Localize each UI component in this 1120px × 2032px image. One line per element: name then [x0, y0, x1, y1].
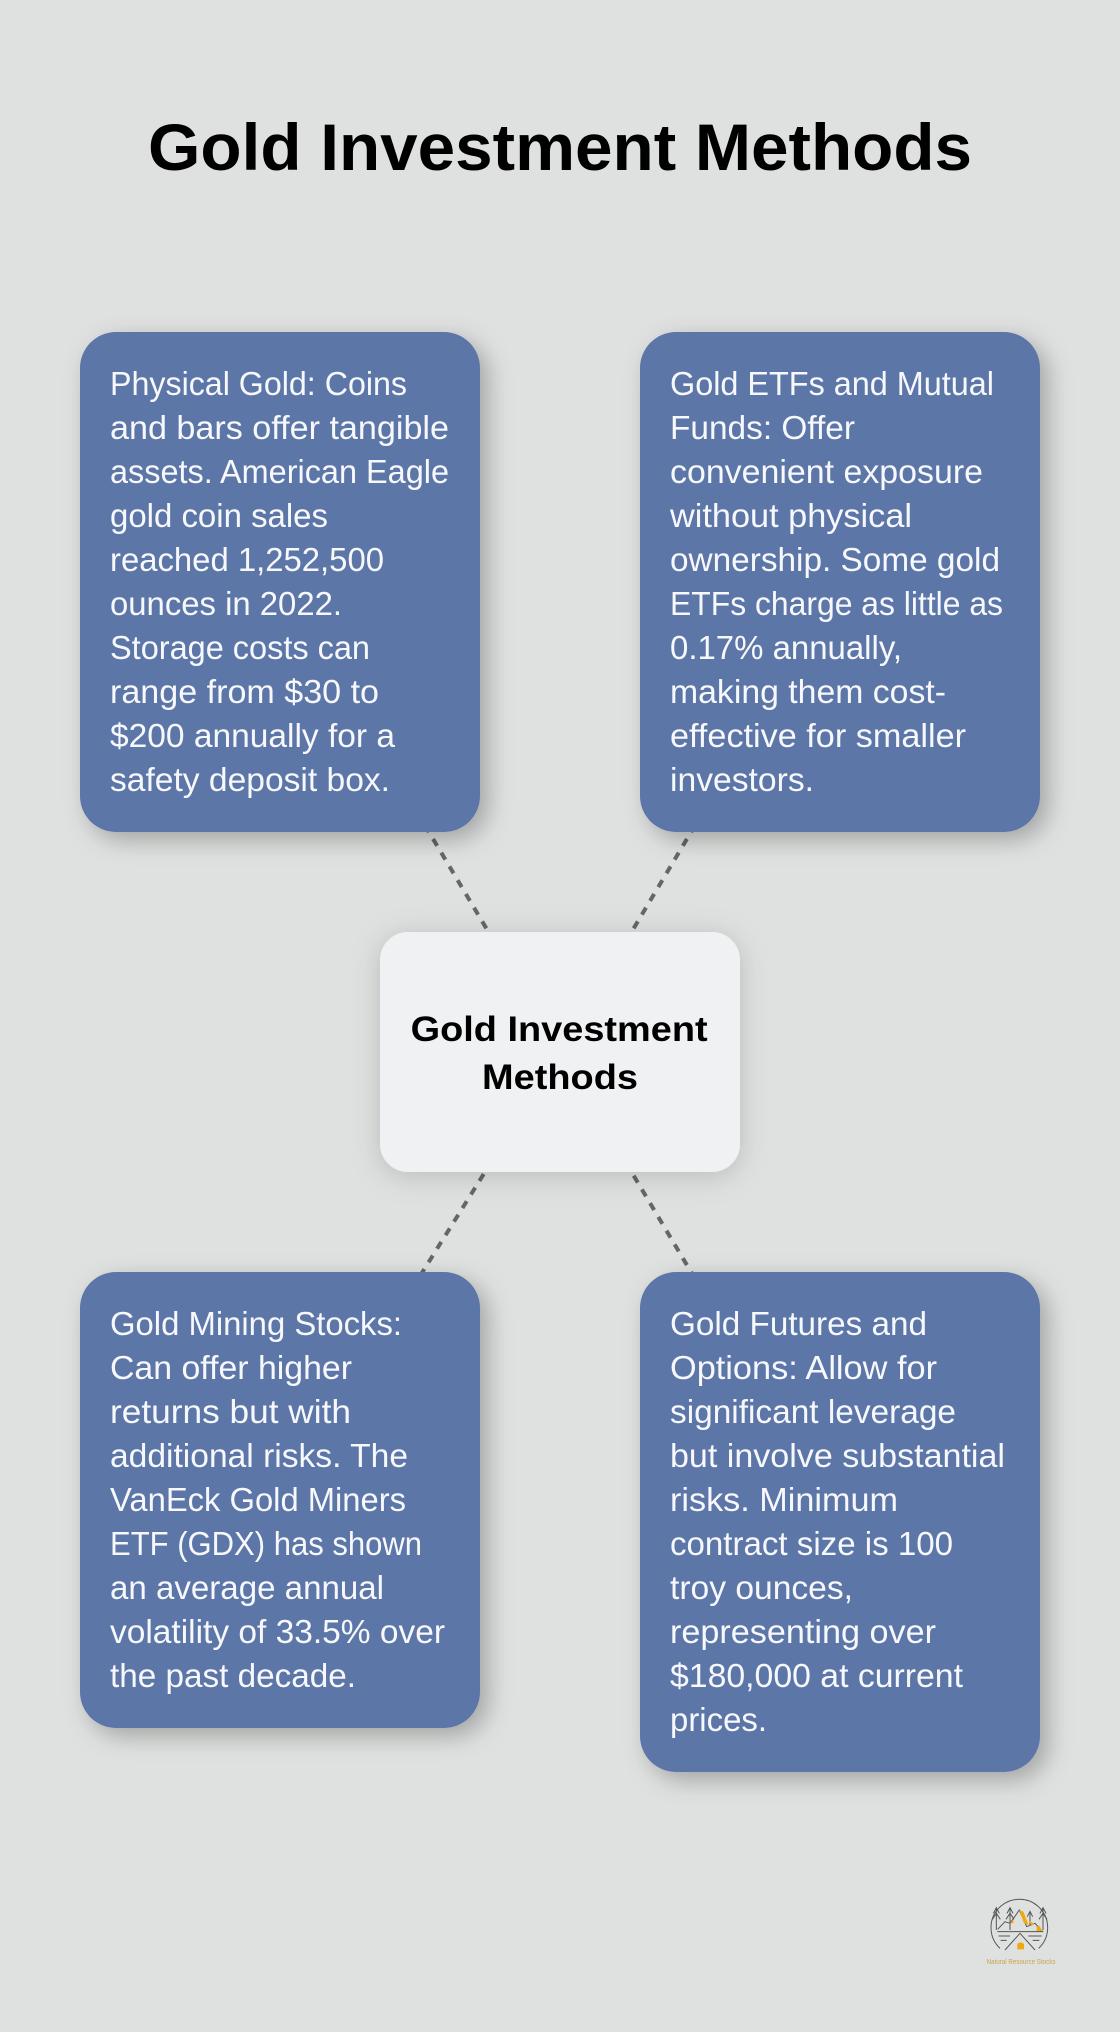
card text: representing over — [670, 1613, 936, 1650]
center box — [380, 932, 740, 1172]
panel: gold mining stocks — [80, 1272, 480, 1728]
card text: safety deposit box. — [110, 761, 390, 798]
panel: physical gold — [80, 332, 480, 832]
card text: reached 1,252,500 — [110, 541, 384, 578]
card text: the past decade. — [110, 1657, 356, 1694]
card text: significant leverage — [670, 1393, 956, 1430]
card text: Options: Allow for — [670, 1349, 937, 1386]
card text: Gold Futures and — [670, 1305, 927, 1342]
connector: center to mining stocks — [280, 1052, 560, 1500]
card text: ETFs charge as little as — [670, 585, 1003, 622]
card text: Storage costs can — [110, 629, 370, 666]
card text: without physical — [669, 497, 912, 534]
card text: Physical Gold: Coins — [110, 365, 407, 402]
card text: investors. — [670, 761, 814, 798]
card text: returns but with — [110, 1393, 351, 1430]
card background — [80, 332, 480, 832]
title: Gold Investment Methods — [148, 110, 972, 184]
card text: Can offer higher — [110, 1349, 352, 1386]
card text: contract size is 100 — [670, 1525, 953, 1562]
card text: volatility of 33.5% over — [110, 1613, 445, 1650]
card text: ounces in 2022. — [110, 585, 342, 622]
card background — [640, 332, 1040, 832]
connector: center to physical gold — [280, 582, 560, 1052]
card text: $200 annually for a — [110, 717, 396, 754]
card text: and bars offer tangible — [110, 409, 449, 446]
center label: Methods — [482, 1058, 638, 1097]
logo emblem — [991, 1899, 1048, 1950]
card text: an average annual — [110, 1569, 384, 1606]
card text: making them cost- — [670, 673, 946, 710]
connector: center to futures — [560, 1052, 840, 1522]
card text: ETF (GDX) has shown — [110, 1525, 422, 1562]
logo caption: Natural Resource Stocks — [986, 1959, 1056, 1966]
connector: center to gold ETFs — [560, 582, 840, 1052]
card text: range from $30 to — [110, 673, 379, 710]
card text: gold coin sales — [110, 497, 328, 534]
card text: 0.17% annually, — [670, 629, 902, 666]
card text: risks. Minimum — [670, 1481, 898, 1518]
center label: Gold Investment — [411, 1010, 708, 1049]
card text: but involve substantial — [670, 1437, 1005, 1474]
card text: prices. — [670, 1701, 767, 1738]
panel: gold ETFs and mutual funds — [640, 332, 1040, 832]
card background — [80, 1272, 480, 1728]
card text: Funds: Offer — [670, 409, 855, 446]
panel: central topic — [380, 932, 740, 1172]
card text: effective for smaller — [670, 717, 966, 754]
card text: troy ounces, — [670, 1569, 853, 1606]
card text: $180,000 at current — [670, 1657, 963, 1694]
card text: assets. American Eagle — [110, 453, 449, 490]
card text: VanEck Gold Miners — [110, 1481, 406, 1518]
card background — [640, 1272, 1040, 1772]
card text: convenient exposure — [670, 453, 983, 490]
panel: gold futures and options — [640, 1272, 1040, 1772]
card text: Gold ETFs and Mutual — [670, 365, 994, 402]
card text: additional risks. The — [110, 1437, 408, 1474]
card text: ownership. Some gold — [670, 541, 1000, 578]
card text: Gold Mining Stocks: — [110, 1305, 402, 1342]
logo: Natural Resource Stocks — [986, 1899, 1056, 1966]
